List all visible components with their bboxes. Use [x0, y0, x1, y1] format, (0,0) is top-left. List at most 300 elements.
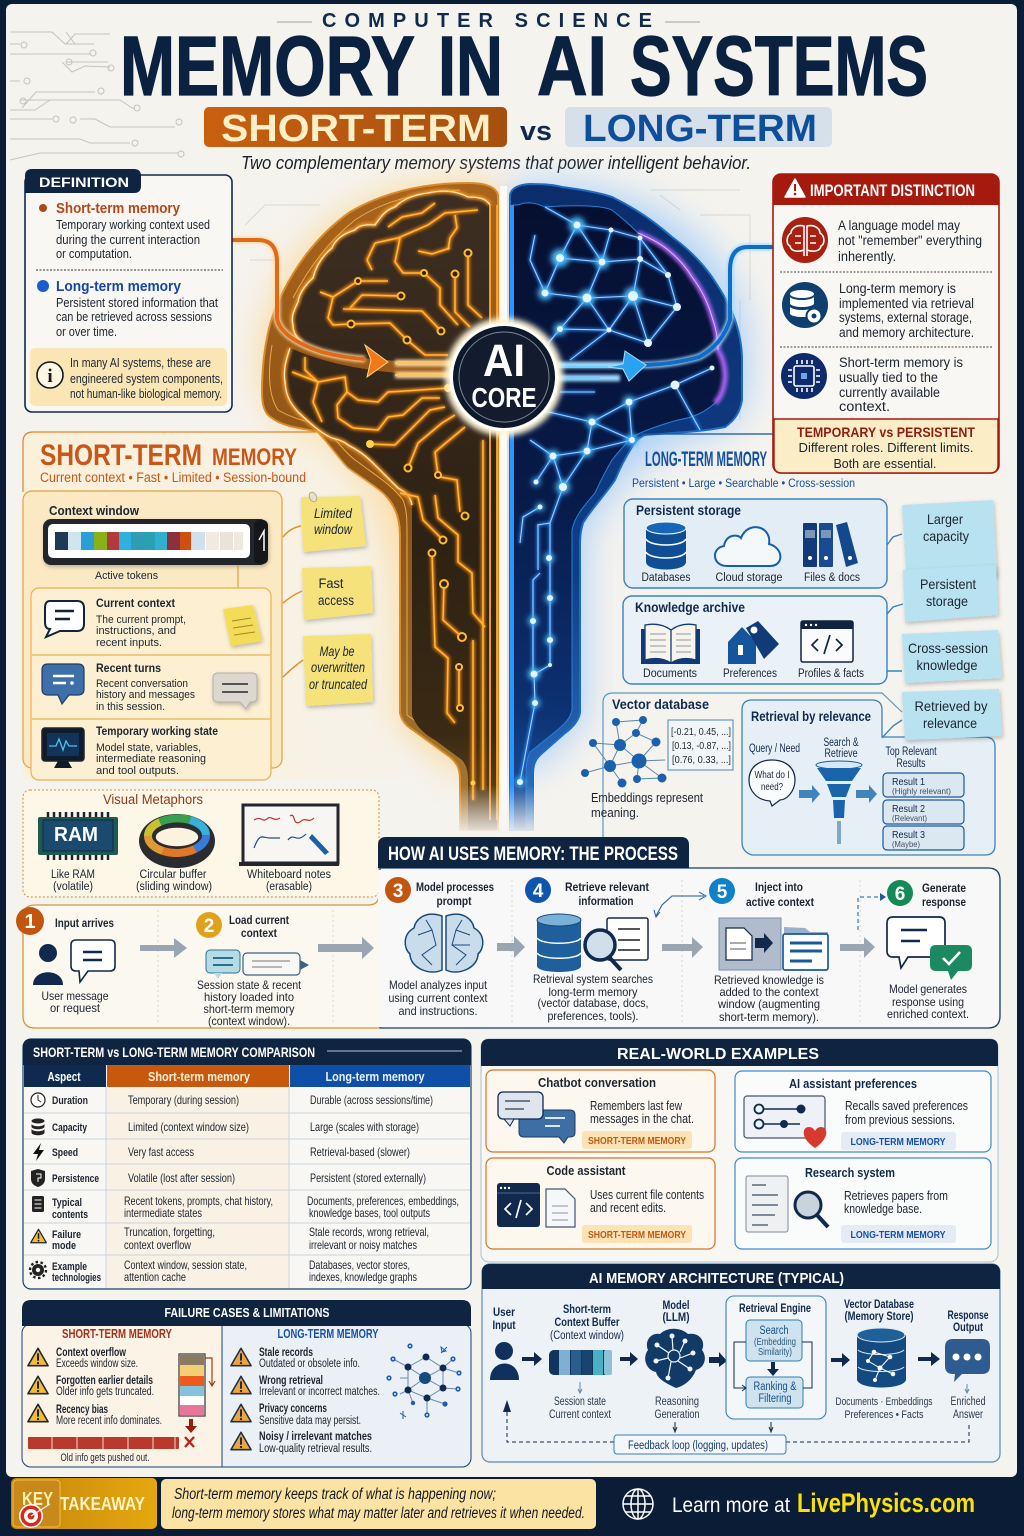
- icon: code window: [798, 621, 864, 680]
- item: language model: inherently.: [838, 249, 896, 264]
- funnel: Search &: [824, 737, 859, 749]
- embedding vectors: [0.13, -0.87, ...]: [672, 741, 731, 752]
- short-term heading: SHORT-TERM: [40, 439, 202, 472]
- step 1: User message: [42, 989, 109, 1003]
- example: research system: knowledge base.: [844, 1202, 922, 1216]
- sticky: larger capacity: Larger: [927, 511, 963, 527]
- right lobes and stem interior: [513, 203, 725, 830]
- step 2: 2: [204, 916, 214, 937]
- temporary working state row: and tool outputs.: [96, 765, 179, 777]
- node: response output: Answer: [953, 1409, 983, 1421]
- step 3: Model processes: [416, 882, 494, 894]
- main title: IN: [438, 19, 503, 113]
- step 3: and instructions.: [398, 1004, 478, 1018]
- short-term heading: Current context • Fast • Limited • Session-bound: [40, 470, 306, 485]
- icon: RAM chip: RAM: [54, 824, 98, 846]
- left lobe glowing outline: [284, 191, 490, 505]
- node: response output: Enriched: [950, 1396, 986, 1408]
- node: response output: Output: [953, 1322, 983, 1334]
- architecture header: [482, 1264, 1000, 1289]
- step 1: or request: [50, 1001, 101, 1015]
- result 2: Result 2: [892, 803, 925, 815]
- row: capacity: Large (scales with storage): [310, 1120, 419, 1134]
- arrow: step 1 to 2: [140, 938, 187, 958]
- query bubble: What do I: [754, 769, 790, 781]
- funnel: Retrieve: [824, 748, 858, 760]
- right rim lines: [510, 205, 514, 830]
- row: persistence: [31, 1169, 426, 1187]
- badge: [841, 1225, 956, 1243]
- row: speed: [33, 1143, 410, 1161]
- arrow: step 3 to 4: [497, 936, 525, 958]
- arrow: input to buffer: [522, 1352, 542, 1366]
- icon: circular buffer: [136, 814, 215, 893]
- panel: visual metaphors: Visual Metaphors: [103, 792, 203, 807]
- takeaway statement: Short-term memory keeps track of what is happening now;: [174, 1486, 496, 1503]
- step 4: (vector database, docs,: [538, 996, 648, 1010]
- row: example technologies: Example: [52, 1261, 87, 1273]
- warning: wrong retrieval: Irrelevant or incorrect matches.: [259, 1386, 380, 1398]
- row: typical contents: Typical: [52, 1197, 82, 1209]
- node: retrieval engine: [726, 1296, 826, 1419]
- item: long-term implementation: [782, 281, 974, 340]
- row: failure mode: mode: [52, 1240, 76, 1252]
- retrieval arrows: [799, 785, 877, 803]
- sticky: retrieved by relevance: [902, 689, 1002, 740]
- icon: RAM chip: [38, 812, 118, 893]
- row: typical contents: intermediate states: [124, 1206, 202, 1220]
- row: persistence: Persistent (stored externally): [310, 1171, 426, 1185]
- failure header: [22, 1300, 471, 1326]
- key takeaway badge: KEY: [22, 1489, 53, 1509]
- example: chatbot conversation: Chatbot conversation: [538, 1075, 656, 1090]
- example: code assistant: Code assistant: [546, 1163, 626, 1178]
- temporary working state row: Temporary working state: [96, 724, 218, 738]
- note callout: [30, 348, 227, 406]
- column headers: Aspect: [48, 1070, 81, 1084]
- recent turns row: history and messages: [96, 689, 195, 701]
- node: context buffer: Short-term: [563, 1304, 611, 1316]
- panel: short-term memory: [23, 432, 399, 897]
- column headers: Long-term memory: [326, 1070, 425, 1084]
- examples header: [481, 1039, 998, 1066]
- short-term heading: [40, 439, 306, 485]
- failure short-term column: SHORT-TERM MEMORY: [62, 1327, 173, 1341]
- kicker: COMPUTER SCIENCE: [322, 10, 652, 32]
- item: long-term implementation: systems, external storage,: [839, 310, 972, 325]
- warning: privacy concerns: Privacy concerns: [259, 1403, 327, 1415]
- node: model: [645, 1300, 705, 1432]
- takeaway statement: long-term memory stores what may matter later and retrieves it when needed.: [172, 1505, 585, 1522]
- badge: long-term: LONG-TERM: [583, 108, 817, 150]
- step 2: context: [241, 928, 277, 940]
- result 2: (Relevant): [892, 813, 927, 823]
- step 4: Retrieve relevant: [565, 882, 649, 894]
- sticky: may be overwritten: or truncated: [309, 677, 367, 692]
- vector database card: meaning.: [591, 806, 639, 820]
- step 4: [525, 877, 653, 1023]
- step 5: Retrieved knowledge is: [714, 973, 824, 987]
- table title: SHORT-TERM vs LONG-TERM MEMORY COMPARISON: [33, 1044, 315, 1060]
- arrow: retrieval to database: [831, 1353, 850, 1367]
- footer link: [672, 1488, 975, 1518]
- query bubble: [749, 743, 800, 806]
- icon: RAM chip: (volatile): [53, 881, 93, 893]
- warning: recency bias: Recency bias: [56, 1404, 108, 1416]
- item: language model: A language model may: [838, 218, 960, 233]
- step 1: 1: [24, 911, 36, 933]
- current context row: instructions, and: [96, 625, 176, 637]
- embedding vectors: [-0.21, 0.45, ...]: [671, 727, 731, 738]
- step 1: [16, 907, 115, 1015]
- note callout: not human-like biological memory.: [70, 386, 222, 401]
- badge: SHORT-TERM MEMORY: [588, 1230, 686, 1241]
- warning: noisy matches: [231, 1431, 372, 1455]
- left lobes and stem interior: [284, 191, 497, 830]
- right network edges: [520, 207, 712, 782]
- row: example technologies: indexes, knowledge graphs: [309, 1270, 417, 1284]
- ranking box: Ranking &: [754, 1381, 797, 1393]
- example: AI assistant preferences: Recalls saved preferences: [845, 1099, 968, 1113]
- search box: Search: [760, 1325, 788, 1337]
- current context row: Current context: [96, 596, 175, 610]
- item: short-term context: usually tied to the: [839, 370, 938, 385]
- vector database card: Vector database: [612, 697, 709, 712]
- footer link: Learn more at: [672, 1494, 790, 1517]
- step 6: Model generates: [889, 982, 967, 996]
- step 6: response: [922, 897, 966, 909]
- arrow: step 4 to 5: [654, 892, 706, 958]
- retrieval by relevance card: Retrieval by relevance: [751, 709, 871, 724]
- icon: cloud: Cloud storage: [716, 572, 782, 584]
- panel: visual metaphors: [23, 790, 379, 897]
- takeaway statement: [161, 1479, 596, 1529]
- short-term definition: [39, 201, 210, 261]
- process heading: [378, 837, 689, 868]
- sticky: retrieved by relevance: relevance: [923, 715, 977, 731]
- icon: open book: [641, 624, 700, 680]
- temporary working state row: Model state, variables,: [96, 742, 201, 754]
- step 2: Load current: [229, 915, 289, 927]
- long-term heading: Persistent • Large • Searchable • Cross-session: [632, 476, 855, 490]
- retrieval by relevance card: [742, 700, 995, 855]
- sticky: cross-session knowledge: Cross-session: [908, 640, 988, 656]
- persistent storage card: [624, 499, 887, 588]
- table title: [23, 1039, 471, 1065]
- sticky: larger capacity: [902, 500, 997, 583]
- persistent storage card: Persistent storage: [636, 503, 741, 518]
- row: duration: [31, 1093, 433, 1107]
- icon: tags: [723, 621, 779, 680]
- warning: forgotten details: Older info gets truncated.: [56, 1386, 154, 1398]
- orange connector and arrow: [232, 240, 452, 377]
- example: chatbot conversation: [486, 1070, 715, 1152]
- warning: noisy matches: Noisy / irrelevant matches: [259, 1431, 372, 1443]
- examples header: REAL-WORLD EXAMPLES: [617, 1046, 819, 1063]
- failure frame: [22, 1324, 471, 1467]
- main title: SYSTEMS: [630, 19, 928, 113]
- step 6: enriched context.: [887, 1007, 969, 1021]
- row: typical contents: knowledge bases, tool outputs: [309, 1206, 430, 1220]
- panel: architecture: [482, 1264, 1000, 1462]
- process heading: HOW AI USES MEMORY: THE PROCESS: [388, 844, 678, 865]
- warning: stale records: Outdated or obsolete info.: [259, 1358, 360, 1370]
- node: vector database: Documents · Embeddings: [836, 1396, 933, 1408]
- sticky: retrieved by relevance: Retrieved by: [914, 698, 988, 714]
- sticky: limited window: [301, 491, 366, 552]
- warning: context overflow: Context overflow: [56, 1347, 126, 1359]
- icon: brain: [405, 914, 483, 972]
- funnel: [816, 737, 862, 844]
- context window box: Active tokens: [95, 570, 158, 582]
- short-term definition: Temporary working context used: [56, 218, 210, 232]
- row: failure mode: context overflow: [124, 1238, 191, 1252]
- temporary working state row: [42, 724, 218, 777]
- icon: globe: [623, 1489, 653, 1519]
- left nodes: [348, 250, 472, 711]
- context window box: [23, 491, 282, 768]
- item: language model: not "remember" everything: [838, 233, 982, 248]
- vs: vs: [520, 116, 552, 146]
- step 2: Session state & recent: [197, 978, 302, 992]
- main title: MEMORY: [120, 19, 415, 113]
- left band line: [270, 190, 460, 750]
- row: duration: Duration: [52, 1095, 88, 1107]
- item: language model: [782, 217, 982, 264]
- recent turns row: [42, 661, 257, 713]
- main title: [120, 19, 928, 113]
- node: vector database: [836, 1299, 933, 1421]
- sticky: fast access: [302, 566, 373, 620]
- warning: recency bias: More recent info dominates.: [56, 1415, 162, 1427]
- panel: long-term memory: [581, 434, 1002, 855]
- key takeaway badge: [11, 1478, 157, 1529]
- row: failure mode: irrelevant or noisy matches: [309, 1238, 417, 1252]
- icon: cloud: [715, 527, 782, 584]
- note callout: engineered system components,: [70, 371, 223, 386]
- step 4: 4: [533, 881, 544, 902]
- ranking box: [746, 1377, 803, 1408]
- step 2: history loaded into: [204, 990, 294, 1004]
- sticky notes: short-term: [283, 491, 373, 706]
- icon: embedding network: [581, 716, 666, 788]
- result 1: (Highly relevant): [892, 786, 951, 796]
- long-term definition: or over time.: [56, 325, 117, 339]
- failure header: FAILURE CASES & LIMITATIONS: [164, 1305, 330, 1320]
- row: speed: Retrieval-based (slower): [310, 1145, 410, 1159]
- temporary vs persistent footer: Different roles. Different limits.: [798, 440, 974, 455]
- temporary vs persistent footer: Both are essential.: [834, 456, 936, 471]
- result 1: Result 1: [892, 776, 925, 788]
- badge: SHORT-TERM MEMORY: [588, 1136, 686, 1147]
- row: example technologies: attention cache: [124, 1270, 186, 1284]
- node: model: Reasoning: [655, 1396, 699, 1408]
- row: duration: Temporary (during session): [128, 1093, 239, 1107]
- current context row: [45, 596, 262, 649]
- central brain illustration: [232, 183, 773, 837]
- node: model: (LLM): [662, 1312, 690, 1324]
- icon: circular buffer: Circular buffer: [140, 869, 207, 881]
- ranking box: Filtering: [758, 1393, 792, 1405]
- step 3: 3: [393, 881, 403, 902]
- context window box: Context window: [49, 503, 140, 518]
- row: capacity: Capacity: [52, 1122, 88, 1134]
- vector database card: [581, 693, 902, 855]
- icon: inject document: [719, 918, 828, 970]
- note callout: i: [47, 366, 53, 387]
- example: code assistant: [486, 1158, 715, 1249]
- badge: [841, 1132, 956, 1150]
- example: code assistant: and recent edits.: [590, 1201, 666, 1215]
- pushed-out bar: Old info gets pushed out.: [60, 1452, 150, 1464]
- short-term definition: Short-term memory: [56, 201, 180, 217]
- badge: [582, 1131, 692, 1149]
- warning: privacy concerns: [231, 1403, 361, 1427]
- blue connector and arrow: [555, 247, 773, 381]
- temporary working state row: intermediate reasoning: [96, 753, 206, 765]
- example: AI assistant preferences: [735, 1071, 991, 1152]
- AI core badge: [445, 318, 563, 436]
- warning: recency bias: [28, 1404, 162, 1427]
- feedback loop: Feedback loop (logging, updates): [628, 1440, 768, 1452]
- left brain silhouette: [262, 183, 498, 830]
- result 2: [883, 800, 964, 824]
- icon: document magnifier: [746, 1176, 828, 1232]
- node: user input: User: [493, 1307, 515, 1319]
- result 3: [883, 826, 964, 850]
- top relevant results: Top Relevant: [886, 746, 937, 758]
- step 3: Model analyzes input: [389, 978, 488, 992]
- definition tab: [25, 169, 141, 193]
- temporary vs persistent footer: TEMPORARY vs PERSISTENT: [797, 424, 975, 440]
- knowledge archive card: Knowledge archive: [635, 600, 745, 615]
- example: AI assistant preferences: AI assistant preferences: [789, 1076, 917, 1091]
- row: typical contents: Recent tokens, prompts, chat history,: [124, 1194, 273, 1208]
- bottom fade: [452, 785, 542, 837]
- icon: context bubbles: [206, 950, 309, 979]
- search box: Similarity): [758, 1347, 792, 1358]
- short-term definition: during the current interaction: [56, 233, 200, 247]
- row: example technologies: technologies: [52, 1272, 101, 1284]
- item: short-term context: currently available: [839, 385, 940, 400]
- architecture header: AI MEMORY ARCHITECTURE (TYPICAL): [589, 1270, 844, 1287]
- sticky: persistent storage: storage: [926, 593, 968, 609]
- top relevant results: Results: [896, 758, 926, 770]
- example: chatbot conversation: Remembers last few: [590, 1099, 683, 1113]
- current context row: The current prompt,: [96, 614, 186, 626]
- item: long-term implementation: Long-term memory is: [839, 281, 956, 296]
- step 5: 5: [717, 882, 728, 903]
- row: typical contents: [32, 1194, 459, 1221]
- context details box: [31, 588, 271, 780]
- icon: open book: Documents: [643, 668, 697, 680]
- example: research system: Research system: [805, 1165, 895, 1180]
- row: persistence: Persistence: [52, 1173, 99, 1185]
- icon: code window: Profiles & facts: [798, 668, 864, 680]
- warning: context overflow: Exceeds window size.: [56, 1358, 138, 1370]
- long-term definition: Long-term memory: [56, 279, 181, 295]
- icon: database search: [537, 914, 648, 972]
- node: context buffer: Session state: [554, 1396, 606, 1408]
- warning: privacy concerns: Sensitive data may persist.: [259, 1415, 361, 1427]
- long-term definition: [37, 279, 218, 339]
- failure long-term column: [222, 1324, 471, 1467]
- embedding vectors: [0.76, 0.33, ...]: [672, 755, 731, 766]
- sticky: persistent storage: [903, 565, 998, 622]
- node: user input: Input: [492, 1320, 516, 1332]
- item: short-term context: Short-term memory is: [839, 355, 963, 370]
- icon: database: [642, 522, 691, 584]
- sticky: may be overwritten: overwritten: [311, 660, 365, 675]
- note callout: In many AI systems, these are: [70, 355, 211, 370]
- icon: user with message: [33, 940, 115, 985]
- query bubble: need?: [761, 781, 783, 793]
- icon: response bubbles: [887, 917, 972, 980]
- badge: LONG-TERM MEMORY: [850, 1137, 946, 1148]
- row: typical contents: contents: [52, 1209, 88, 1221]
- failure long-term column: LONG-TERM MEMORY: [278, 1327, 379, 1341]
- item: long-term implementation: and memory architecture.: [839, 325, 974, 340]
- footer link: LivePhysics.com: [797, 1488, 975, 1518]
- definition tab: DEFINITION: [39, 174, 129, 190]
- process frame: [23, 868, 1000, 1028]
- icon: RAM chip: Like RAM: [51, 869, 95, 881]
- step 4: information: [578, 896, 634, 908]
- top relevant results: [883, 746, 964, 850]
- item: short-term context: [781, 353, 963, 414]
- warning: forgotten details: Forgotten earlier details: [56, 1375, 153, 1387]
- sticky: fast access: Fast: [318, 576, 344, 591]
- step 3: prompt: [436, 896, 472, 908]
- arrow: database to output: [918, 1352, 940, 1366]
- warning: wrong retrieval: [231, 1375, 380, 1398]
- arrow: model to retrieval: [709, 1352, 727, 1367]
- badge: [582, 1225, 692, 1243]
- right purple rim: [638, 233, 725, 403]
- step 4: long-term memory: [548, 985, 638, 999]
- long-term definition: Persistent stored information that: [56, 296, 218, 310]
- step 2: [196, 912, 309, 1028]
- recent turns row: Recent turns: [96, 661, 161, 675]
- example: research system: Retrieves papers from: [844, 1189, 948, 1203]
- sticky: larger capacity: capacity: [923, 528, 969, 544]
- row: capacity: [32, 1118, 419, 1135]
- node: vector database: Preferences • Facts: [844, 1409, 924, 1421]
- search box: [746, 1320, 802, 1361]
- warning: wrong retrieval: Wrong retrieval: [259, 1375, 323, 1387]
- row: example technologies: [30, 1258, 417, 1284]
- embedding vectors: [668, 720, 733, 770]
- step 3: using current context: [388, 991, 488, 1005]
- icon: whiteboard: (erasable): [266, 881, 312, 893]
- arrow: step 2 to 3: [318, 937, 374, 959]
- short-term column tint: [107, 1087, 289, 1288]
- knowledge archive card: [623, 596, 887, 684]
- panel: important distinction: [773, 174, 999, 473]
- step 5: window (augmenting: [717, 997, 820, 1011]
- step 2: short-term memory: [204, 1002, 294, 1016]
- right glowing nodes: [515, 217, 642, 787]
- step 6: response using: [892, 995, 964, 1009]
- step 4: preferences, tools).: [548, 1009, 638, 1023]
- node: response output: Response: [948, 1310, 988, 1322]
- AI core badge: CORE: [472, 382, 536, 413]
- node: user input: [490, 1307, 519, 1380]
- result 3: Result 3: [892, 829, 925, 841]
- row: typical contents: Documents, preferences, embeddings,: [307, 1194, 459, 1208]
- panel: comparison table: [23, 1039, 471, 1289]
- search box: (Embedding: [754, 1337, 796, 1348]
